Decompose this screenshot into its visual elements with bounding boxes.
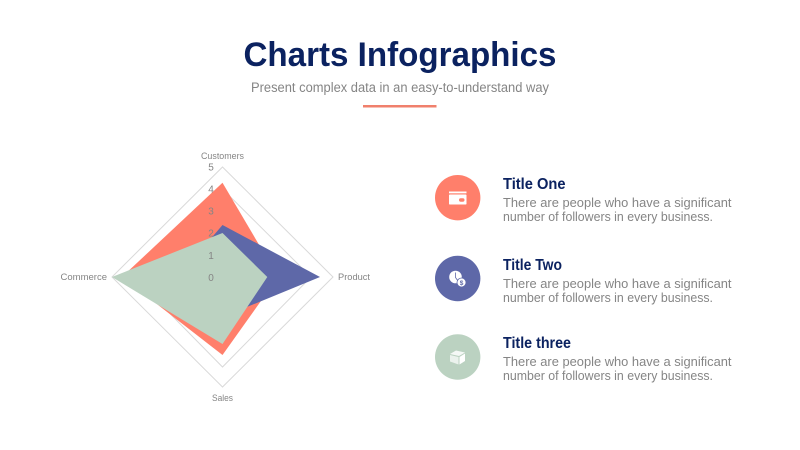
description: There are people who have a significant	[503, 354, 732, 369]
radar chart	[60, 151, 370, 404]
title underline	[363, 105, 436, 108]
heading: Title One	[503, 176, 566, 193]
axis label: Commerce: Commerce	[60, 272, 107, 283]
series: red	[122, 183, 278, 355]
description	[503, 276, 732, 305]
axis scale numbers: 1	[208, 251, 214, 262]
description: number of followers in every business.	[503, 368, 713, 383]
item: Title Two	[435, 256, 732, 305]
heading: Title Two	[503, 257, 562, 274]
description: number of followers in every business.	[503, 209, 713, 224]
axis label: Sales: Sales	[212, 393, 233, 404]
icon: clock and coin: $	[460, 280, 464, 287]
axis scale numbers	[208, 162, 214, 284]
icon: clock and coin	[435, 256, 480, 301]
description	[503, 354, 732, 383]
subtitle: Present complex data in an easy-to-understand way	[251, 80, 549, 95]
axis label: Product: Product	[338, 272, 370, 283]
title: Charts Infographics	[244, 36, 556, 74]
description: There are people who have a significant	[503, 195, 732, 210]
item: Title three	[435, 334, 732, 383]
series: blue	[178, 225, 320, 317]
description: number of followers in every business.	[503, 290, 713, 305]
description	[503, 195, 732, 224]
description: There are people who have a significant	[503, 276, 732, 291]
axis scale numbers: 3	[208, 206, 214, 218]
axis scale numbers: 2	[208, 228, 214, 240]
icon: box	[435, 334, 480, 380]
chart grid	[112, 167, 333, 387]
series: green	[112, 233, 267, 344]
heading: Title three	[503, 335, 571, 352]
axis scale numbers: 5	[208, 162, 214, 174]
item: Title One	[435, 175, 732, 224]
axis scale numbers: 4	[208, 184, 214, 196]
axis scale numbers: 0	[208, 273, 214, 284]
axis label: Customers: Customers	[201, 151, 244, 162]
icon: card	[435, 175, 480, 220]
